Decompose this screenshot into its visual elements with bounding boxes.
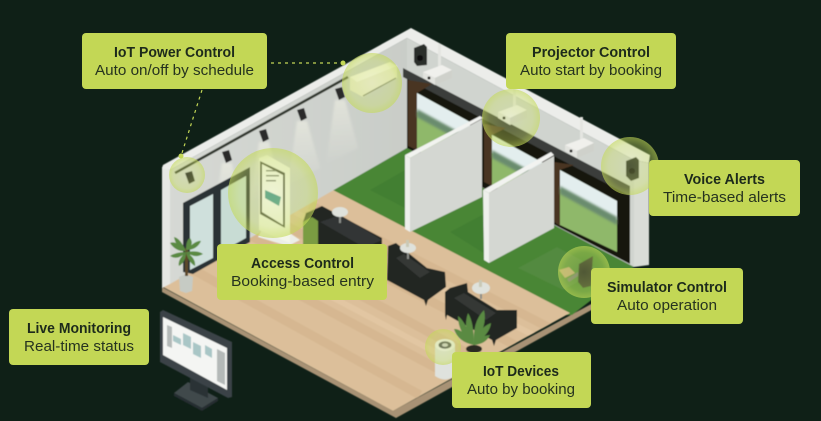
highlight: speaker xyxy=(601,137,659,195)
label: Access Control: Booking-based entry xyxy=(231,274,375,290)
screen 2 xyxy=(492,135,545,214)
kiosk xyxy=(258,155,300,246)
floor slab edge xyxy=(162,287,595,418)
air purifier xyxy=(435,339,455,380)
label: Projector Control xyxy=(506,33,676,89)
label: Voice Alerts: Voice Alerts xyxy=(684,172,765,188)
projector 1 xyxy=(423,44,452,85)
partition 1 xyxy=(405,116,483,232)
label: IoT Devices: Auto by booking xyxy=(467,382,575,398)
label: IoT Power Control xyxy=(82,33,267,89)
label: Live Monitoring: Real-time status xyxy=(24,339,134,355)
projector 2 xyxy=(498,84,527,125)
table 3 xyxy=(472,280,490,299)
highlight: projector xyxy=(482,89,540,147)
plant right xyxy=(454,310,491,353)
label: Access Control xyxy=(217,244,387,300)
label: IoT Devices xyxy=(452,352,591,408)
monitor xyxy=(160,310,232,411)
tee mats xyxy=(370,170,600,290)
dark screen wall xyxy=(407,72,630,264)
label: Voice Alerts: Time-based alerts xyxy=(663,190,786,206)
highlight: air conditioner xyxy=(342,53,402,113)
label: Access Control: Access Control xyxy=(251,256,354,272)
dotted connector to spot light xyxy=(178,90,202,158)
speaker left xyxy=(414,44,427,66)
label: Simulator Control: Auto operation xyxy=(617,298,717,314)
partition 2 xyxy=(483,152,554,263)
sofa 3 xyxy=(445,283,517,346)
label: Projector Control: Projector Control xyxy=(532,45,650,61)
label: Voice Alerts xyxy=(649,160,800,216)
air conditioner xyxy=(350,62,397,97)
projector 3 xyxy=(565,117,594,158)
label: IoT Devices: IoT Devices xyxy=(483,364,559,380)
label: Projector Control: Auto start by booking xyxy=(520,63,662,79)
label: Live Monitoring: Live Monitoring xyxy=(27,321,131,337)
label: IoT Power Control: IoT Power Control xyxy=(114,45,235,61)
left wall end xyxy=(162,167,170,288)
dotted connector to air conditioner xyxy=(271,60,346,66)
table 1 xyxy=(332,207,348,223)
highlight: simulator xyxy=(558,246,610,298)
brown throw panels xyxy=(408,80,574,226)
projector beam xyxy=(403,68,630,196)
highlight: kiosk xyxy=(228,148,318,238)
screen 3 xyxy=(560,170,617,252)
sofa 2 xyxy=(387,243,446,306)
simulator unit xyxy=(559,256,593,288)
highlight: purifier xyxy=(425,329,461,365)
track light rail xyxy=(175,77,348,173)
wood lounge floor xyxy=(160,185,580,415)
glass door xyxy=(183,167,250,274)
back wall face xyxy=(407,38,634,267)
label: Live Monitoring xyxy=(9,309,149,365)
spot lights xyxy=(185,87,345,184)
sofa 1 xyxy=(303,206,382,256)
light cones xyxy=(213,100,358,220)
wall top edge xyxy=(162,28,650,170)
label: Simulator Control: Simulator Control xyxy=(607,280,727,296)
label: IoT Power Control: Auto on/off by schedule xyxy=(95,63,254,79)
right wall end xyxy=(634,160,649,267)
left wall face xyxy=(170,38,407,284)
green simulator floor xyxy=(333,148,634,316)
highlight: left spot light xyxy=(169,157,205,193)
speaker right xyxy=(626,157,639,181)
label: Simulator Control xyxy=(591,268,743,324)
screen 1 xyxy=(417,93,470,178)
table 2 xyxy=(400,240,416,259)
room illustration xyxy=(160,28,650,418)
plant left xyxy=(170,237,203,293)
